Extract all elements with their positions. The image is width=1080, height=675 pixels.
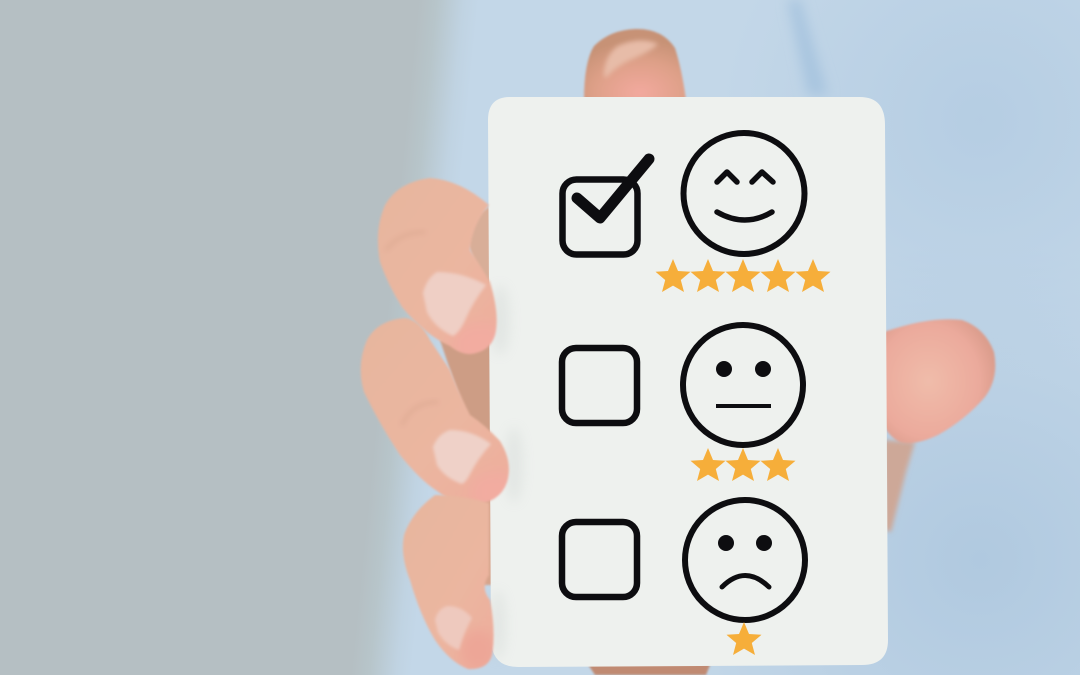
icon: check mark [577, 159, 649, 218]
thumb [884, 319, 995, 532]
fingernail [604, 40, 658, 78]
photo scene: hand holding feedback card [359, 0, 1080, 675]
row 3: sad face [685, 500, 805, 620]
index finger [377, 177, 498, 355]
top finger [584, 29, 686, 100]
row 2: neutral face [683, 325, 803, 445]
feedback card [488, 97, 888, 667]
palm behind the fingers [440, 205, 712, 675]
fingernail [435, 606, 472, 650]
fingernail [433, 430, 491, 484]
middle finger [360, 317, 510, 502]
ring finger [402, 494, 495, 670]
row 2: three stars [690, 448, 796, 481]
row 1: checked box [562, 159, 649, 254]
row 2: empty box [562, 348, 637, 423]
row 1: happy face [684, 133, 804, 254]
row 3: empty box [562, 522, 637, 597]
row 3: one star [726, 622, 762, 655]
row 1: five stars [656, 259, 830, 292]
soft finger shadows on card [490, 285, 523, 660]
fingernail [423, 272, 486, 336]
